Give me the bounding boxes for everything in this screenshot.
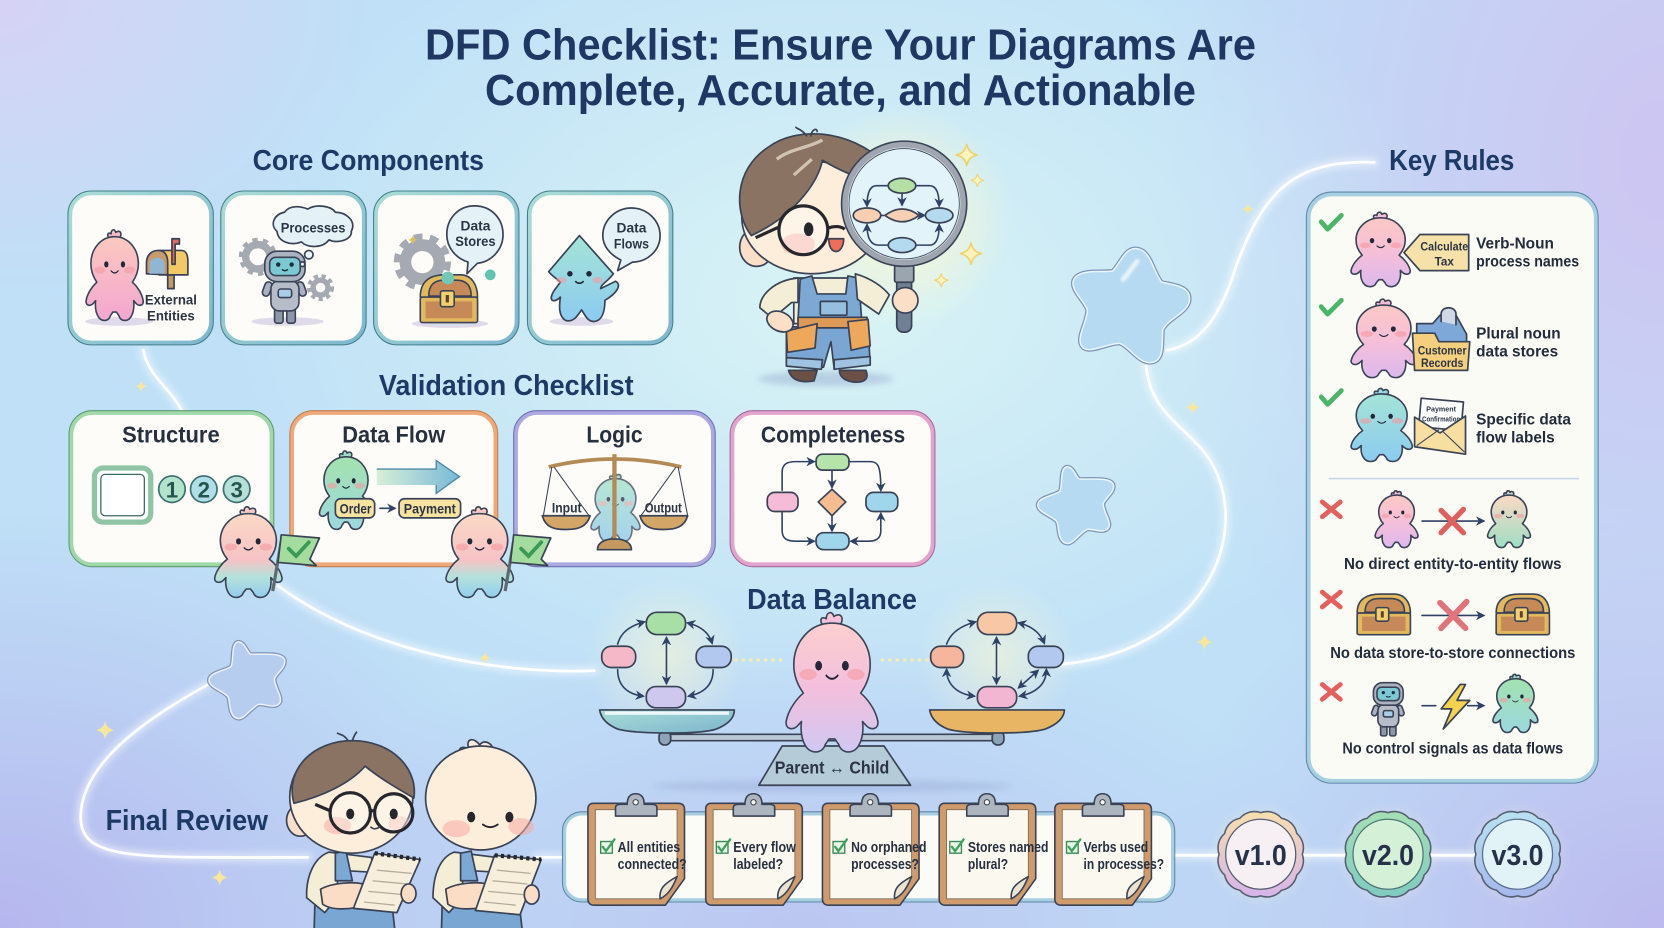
rule: plural noun data stores: Records [1421, 357, 1463, 370]
rule: verb-noun process names [1321, 212, 1579, 287]
card: logic: Input [552, 501, 582, 516]
heading: data balance: Data Balance [747, 584, 917, 616]
card: data flow [290, 411, 498, 567]
rule: specific data flow labels: flow labels [1476, 430, 1555, 447]
heading: final review: Final Review [106, 805, 269, 837]
panel: validation checklist [69, 411, 935, 567]
card: external entities: External [145, 293, 197, 308]
card: data flows: Data [616, 220, 647, 235]
card: structure: 3 [230, 478, 243, 503]
card: logic [514, 411, 715, 567]
heading: validation checklist: Validation Checklist [379, 370, 634, 402]
clipboard: all entities connected: All entities [618, 840, 680, 856]
title: DFD Checklist: Ensure Your Diagrams Are [425, 21, 1256, 69]
rule: no control signals as data flows: No control signals as data flows [1342, 740, 1563, 757]
character: reviewer mascot [426, 740, 541, 928]
clipboard: every flow labeled [706, 794, 802, 905]
badge: v1.0: v1.0 [1235, 840, 1287, 872]
card: data stores [374, 191, 519, 345]
diagram: data balance scale [587, 578, 1076, 793]
diagram: data balance scale: Parent ↔ Child [775, 758, 889, 778]
character: mascot with flag 1 [215, 507, 319, 597]
card: data flow: Order [340, 502, 372, 517]
card: structure: Structure [122, 422, 220, 448]
clipboard: verbs used in processes: in processes? [1083, 857, 1164, 873]
rule: plural noun data stores: Customer [1418, 344, 1467, 357]
rule: specific data flow labels [1321, 388, 1571, 462]
rule: no data store-to-store connections: No data store-to-store connections [1330, 645, 1575, 662]
card: processes: Processes [281, 220, 346, 235]
clipboard: all entities connected: connected? [618, 857, 687, 873]
rule: verb-noun process names: Verb-Noun [1476, 235, 1554, 252]
rule: specific data flow labels: Confirmation [1422, 414, 1461, 423]
decorative star: large [1075, 251, 1187, 360]
clipboard: no orphaned processes: No orphaned [851, 840, 926, 856]
rule: plural noun data stores [1321, 299, 1561, 378]
badge: v3.0: v3.0 [1492, 840, 1544, 872]
clipboard: every flow labeled: Every flow [733, 840, 797, 856]
decorative star: middle [1040, 469, 1112, 541]
clipboard: verbs used in processes [1055, 794, 1164, 905]
card: structure [69, 411, 274, 567]
card: data flows: Flows [614, 236, 649, 251]
flow ribbons [81, 162, 1475, 858]
hero: inspector with magnifying glass [740, 106, 1013, 386]
sparkles along ribbons [96, 203, 1254, 886]
rule: verb-noun process names: Tax [1435, 255, 1454, 268]
card: data flows [527, 191, 673, 345]
card: completeness: Completeness [761, 422, 905, 448]
card: data flow: Payment [404, 502, 456, 517]
rule: verb-noun process names: Calculate [1420, 240, 1469, 253]
badge: v3.0 [1464, 801, 1571, 907]
clipboard: no orphaned processes [822, 794, 926, 905]
title: Complete, Accurate, and Actionable [485, 67, 1196, 115]
heading: core components: Core Components [253, 145, 484, 177]
diagram: parent level [602, 612, 731, 708]
rule: specific data flow labels: Specific data [1476, 411, 1571, 428]
card: data stores: Data [461, 218, 491, 233]
badge: v1.0 [1208, 801, 1314, 907]
clipboard: no orphaned processes: processes? [851, 857, 919, 873]
badge: v2.0 [1335, 801, 1441, 907]
heading: key rules: Key Rules [1389, 145, 1514, 177]
character: reviewer with glasses [287, 732, 420, 928]
card: logic: Output [645, 501, 682, 516]
card: logic: Logic [586, 422, 643, 448]
title [425, 21, 1256, 115]
clipboard: every flow labeled: labeled? [733, 857, 783, 873]
rule: no control signals as data flows [1322, 674, 1563, 757]
character: mascot with flag 2 [446, 507, 551, 597]
card: completeness [730, 411, 935, 567]
rule: no data store-to-store connections [1322, 592, 1575, 662]
rule: plural noun data stores: data stores [1476, 344, 1558, 361]
diagram: child level [931, 612, 1063, 708]
panel: key rules [1306, 192, 1598, 783]
clipboard: stores named plural: Stores named [968, 840, 1048, 856]
panel: final review checklist [562, 794, 1175, 905]
card: data stores: Stores [455, 234, 496, 249]
rule: no direct entity-to-entity flows: No direct entity-to-entity flows [1344, 556, 1562, 573]
clipboard: verbs used in processes: Verbs used [1083, 840, 1148, 856]
character: balance mascot [786, 613, 878, 752]
card: data flow: Data Flow [342, 422, 446, 448]
panel: core components [68, 191, 673, 345]
clipboard: all entities connected [588, 794, 687, 905]
card: external entities: Entities [147, 308, 195, 323]
card: external entities [68, 191, 213, 345]
badge: v2.0: v2.0 [1362, 840, 1414, 872]
rule: specific data flow labels: Payment [1426, 405, 1456, 414]
rule: plural noun data stores: Plural noun [1476, 326, 1561, 343]
decorative star: left [211, 644, 283, 717]
rule: no direct entity-to-entity flows [1322, 491, 1562, 573]
clipboard: stores named plural [939, 794, 1048, 905]
rule: verb-noun process names: process names [1476, 253, 1579, 270]
card: processes [221, 191, 366, 345]
clipboard: stores named plural: plural? [968, 857, 1008, 873]
card: structure: 2 [198, 478, 210, 503]
card: structure: 1 [166, 478, 178, 503]
